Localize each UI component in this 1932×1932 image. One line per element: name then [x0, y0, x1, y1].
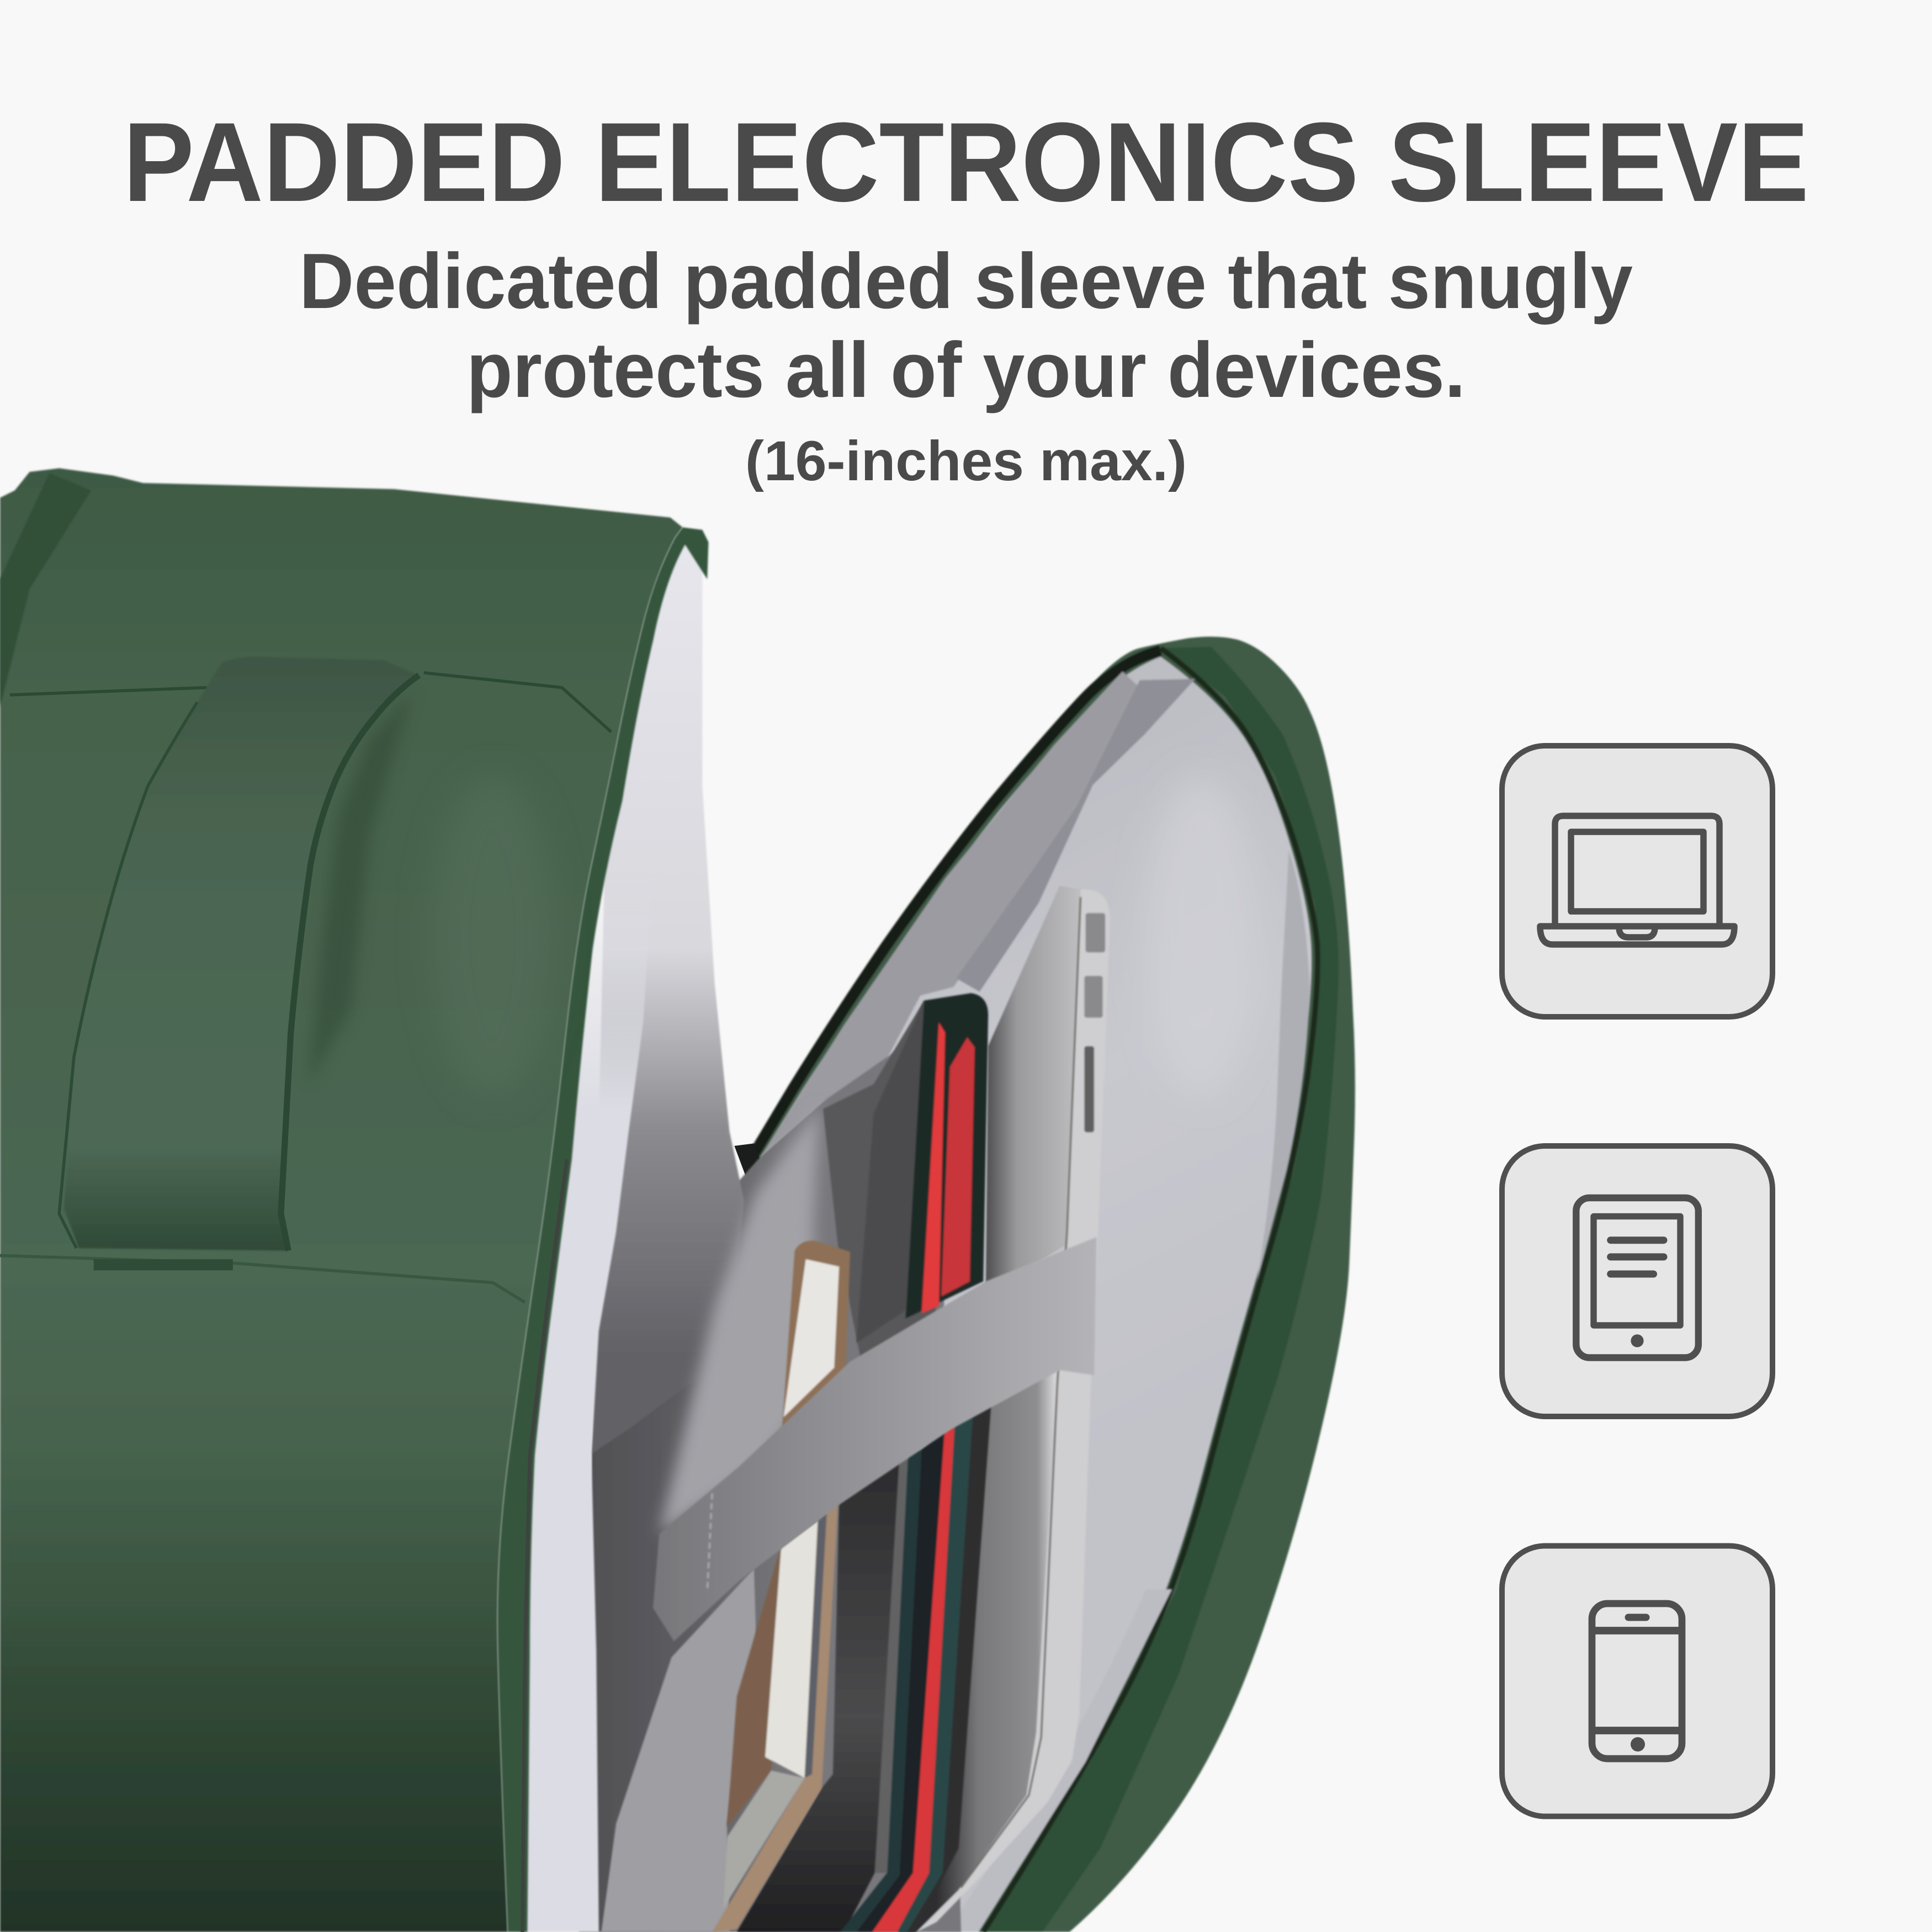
shadow under handle: [308, 690, 413, 1084]
folio lower band black: [856, 1426, 945, 1932]
flap inner lining: [739, 657, 1312, 1932]
laptop lid lower: [899, 1368, 1057, 1932]
shoulder band at top left: [0, 473, 91, 707]
notebook lower tan cover: [712, 1506, 838, 1932]
product photo: open backpack with devices: [0, 468, 1355, 1932]
subtitle line 2: protects all of your devices.: [466, 326, 1466, 414]
notebook lower brown cover: [727, 1540, 795, 1827]
lit patch on body: [431, 776, 554, 1097]
port usb: [1086, 913, 1105, 952]
notebook lower pages: [765, 1520, 818, 1778]
flap outer shell: [739, 636, 1355, 1932]
notebook spine top: [781, 1241, 850, 1442]
handle shadow left: [59, 702, 197, 1248]
notebook: [712, 1241, 850, 1932]
laptop ports: [1084, 913, 1105, 1132]
body shell: [0, 468, 683, 1932]
folio lower red page: [872, 1417, 955, 1932]
folio lower cover: [737, 1458, 899, 1932]
subtitle line 1: Dedicated padded sleeve that snugly: [299, 237, 1633, 325]
laptop lid upper: [986, 886, 1082, 1294]
top seam left: [10, 688, 207, 695]
interior lower pocket fabric: [601, 1569, 757, 1932]
laptop edge slab: [917, 889, 1110, 1932]
shadow beside folio: [907, 1395, 992, 1932]
flap zipper band: [981, 647, 1339, 1932]
reinforced stitch patch: [94, 1259, 233, 1270]
folio upper part: [856, 993, 988, 1343]
lower seam: [0, 1256, 525, 1302]
interior back wall: [579, 1023, 961, 1932]
strap stitch: [707, 1493, 712, 1592]
strap body: [653, 1237, 1097, 1641]
notebook blue endpaper: [805, 1513, 827, 1778]
notebook top pages: [784, 1259, 839, 1417]
top seam right: [424, 673, 611, 732]
backpack left liner wing: [591, 545, 744, 1454]
size note: (16-inches max.): [745, 429, 1187, 492]
notebook bottom pages: [723, 1771, 805, 1909]
port card slot: [1084, 1046, 1094, 1132]
flap dark zipper line: [983, 648, 1318, 1932]
folio lower teal right: [897, 1405, 973, 1932]
folio grey cover: [856, 1000, 924, 1343]
bottom selvedge strip: [946, 1589, 1172, 1932]
folio lower part: [737, 1395, 992, 1932]
laptop: [899, 886, 1110, 1932]
icon: laptop: [1502, 746, 1772, 1017]
elastic strap: [653, 1237, 1097, 1641]
title: PADDED ELECTRONICS SLEEVE: [123, 99, 1809, 225]
backpack liner bright strip: [517, 862, 653, 1932]
handle shadow right: [281, 675, 419, 1251]
zipper band of body: [497, 527, 708, 1932]
folio spine: [906, 993, 988, 1318]
laptop seam line: [961, 897, 1081, 1888]
folio lower band teal: [840, 1449, 922, 1932]
red page right: [941, 1037, 975, 1296]
backpack main body: [0, 468, 708, 1932]
right mesh strip: [1257, 850, 1310, 1281]
upper fold fabric: [761, 672, 1140, 1156]
icon: smartphone: [1502, 1546, 1772, 1816]
backpack open flap: [739, 636, 1355, 1932]
port thunderbolt: [1084, 976, 1103, 1018]
zipper end black tab: [734, 1143, 764, 1185]
mesh strip: [956, 679, 1195, 992]
lining soft highlight: [1146, 776, 1257, 1097]
dark panel behind notebooks: [823, 1000, 936, 1368]
carry handle: [64, 657, 419, 1251]
zipper teeth: [522, 1159, 567, 1932]
flap black zipper edge: [753, 651, 1161, 1156]
interior upper pocket fabric: [659, 1106, 828, 1534]
icon: tablet: [1502, 1146, 1772, 1416]
folio lower band grey: [875, 1454, 908, 1873]
red page left: [922, 1023, 945, 1313]
